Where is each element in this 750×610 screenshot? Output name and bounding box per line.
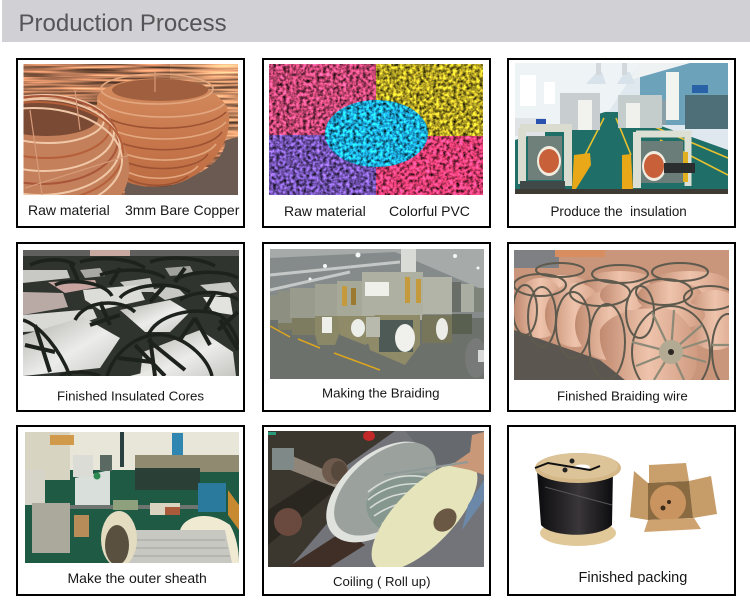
caption: Coiling ( Roll up)	[333, 574, 430, 589]
panel: raw material copper	[0, 59, 244, 227]
caption: Colorful PVC	[389, 203, 470, 219]
caption: Finished Insulated Cores	[57, 388, 204, 404]
panel: make the outer sheath	[17, 426, 244, 595]
caption: Make the outer sheath	[68, 570, 207, 586]
photo: braiding machines	[270, 249, 487, 380]
panel: produce the insulation	[508, 59, 735, 227]
photo: white cable reels	[23, 250, 239, 376]
caption: Raw material	[284, 203, 366, 219]
panel: raw material PVC	[263, 59, 490, 227]
panel: finished braiding wire	[508, 243, 745, 411]
panel: finished insulated cores	[17, 243, 244, 411]
photo: cardboard box	[630, 463, 717, 532]
photo: colorful PVC pellets	[269, 64, 484, 195]
photo: extrusion line with reel	[25, 432, 239, 567]
header bar	[2, 0, 750, 42]
caption: Making the Braiding	[322, 386, 440, 400]
caption: Finished packing	[578, 570, 687, 586]
panel: making the braiding	[263, 243, 490, 411]
photo: insulation line	[515, 63, 728, 195]
caption: Produce the insulation	[550, 204, 687, 219]
photo: coiling reel	[268, 431, 484, 567]
photo: bare copper coils	[24, 64, 238, 195]
photo: copper coloured reels	[514, 250, 729, 380]
caption: 3mm Bare Copper	[125, 202, 240, 218]
caption: Raw material	[28, 202, 110, 218]
panel: finished packing	[508, 426, 735, 595]
caption: Finished Braiding wire	[557, 388, 688, 404]
panel: coiling	[263, 422, 494, 595]
photo: black cable spool	[535, 453, 621, 546]
title: Production Process	[18, 10, 227, 37]
